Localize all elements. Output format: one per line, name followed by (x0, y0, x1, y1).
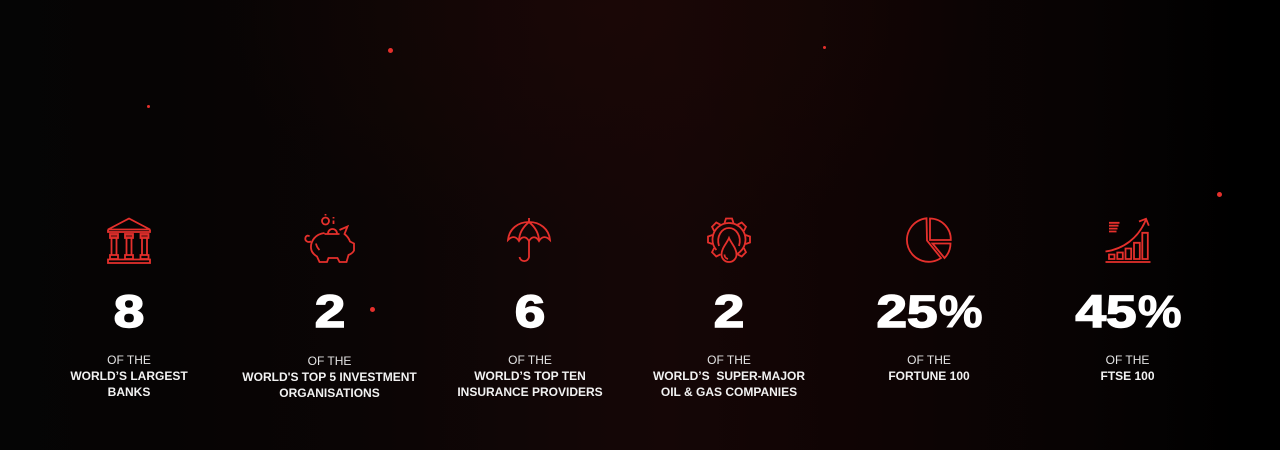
text: oil and gas caption: OF THE (707, 353, 751, 367)
text: insurance caption: OF THE (508, 353, 552, 367)
number: 6: 6 (515, 286, 545, 337)
panel: fortune 100 stat (876, 217, 983, 383)
decorative particle (388, 48, 393, 53)
number: 8: 8 (114, 286, 144, 337)
panel: insurance stat (457, 218, 603, 399)
text: insurance caption (457, 353, 603, 399)
text: ftse caption: OF THE (1106, 353, 1149, 367)
text: oil and gas caption: WORLD’S SUPER-MAJOR (653, 369, 805, 383)
text: investment caption (242, 354, 417, 400)
number: 2: 2 (714, 286, 744, 337)
icon: bank (107, 218, 151, 264)
decorative particle (147, 105, 150, 108)
decorative particle (823, 46, 826, 49)
text: insurance caption: WORLD’S TOP TEN (474, 369, 586, 383)
decorative particle (1217, 192, 1222, 197)
icon: gear with oil drop (707, 218, 751, 263)
number: 45% (1075, 286, 1181, 337)
text: banks caption (70, 353, 188, 399)
text: fortune caption: FORTUNE 100 (888, 369, 970, 383)
panel: ftse 100 stat (1075, 218, 1181, 383)
icon: umbrella (506, 218, 552, 262)
number: 25% (876, 286, 983, 337)
text: insurance caption: INSURANCE PROVIDERS (457, 385, 603, 399)
number: 45%: 45 (1075, 286, 1136, 337)
text: banks caption: BANKS (108, 385, 150, 399)
text: investment caption: ORGANISATIONS (279, 386, 380, 400)
panel: investment organisations stat (242, 214, 417, 400)
text: ftse caption: FTSE 100 (1100, 369, 1155, 383)
number: 25%: 25 (876, 286, 938, 337)
decorative particle (370, 307, 375, 312)
icon: piggy bank (304, 214, 355, 263)
text: banks caption: WORLD’S LARGEST (70, 369, 188, 383)
text: fortune caption (888, 353, 970, 383)
text: oil and gas caption: OIL & GAS COMPANIES (661, 385, 797, 399)
text: fortune caption: OF THE (907, 353, 951, 367)
panel: oil and gas stat (653, 218, 805, 399)
text: oil and gas caption (653, 353, 805, 399)
icon: growth chart (1105, 218, 1150, 263)
text: banks caption: OF THE (107, 353, 151, 367)
number: 2: 2 (314, 286, 345, 337)
text: ftse caption (1100, 353, 1155, 383)
icon: pie chart (906, 217, 952, 263)
number: 45%: % (1137, 286, 1181, 337)
number: 25%: % (939, 286, 983, 337)
text: investment caption: OF THE (308, 354, 351, 368)
panel: banks stat (70, 218, 188, 399)
text: investment caption: WORLD'S TOP 5 INVESTMENT (242, 370, 417, 384)
